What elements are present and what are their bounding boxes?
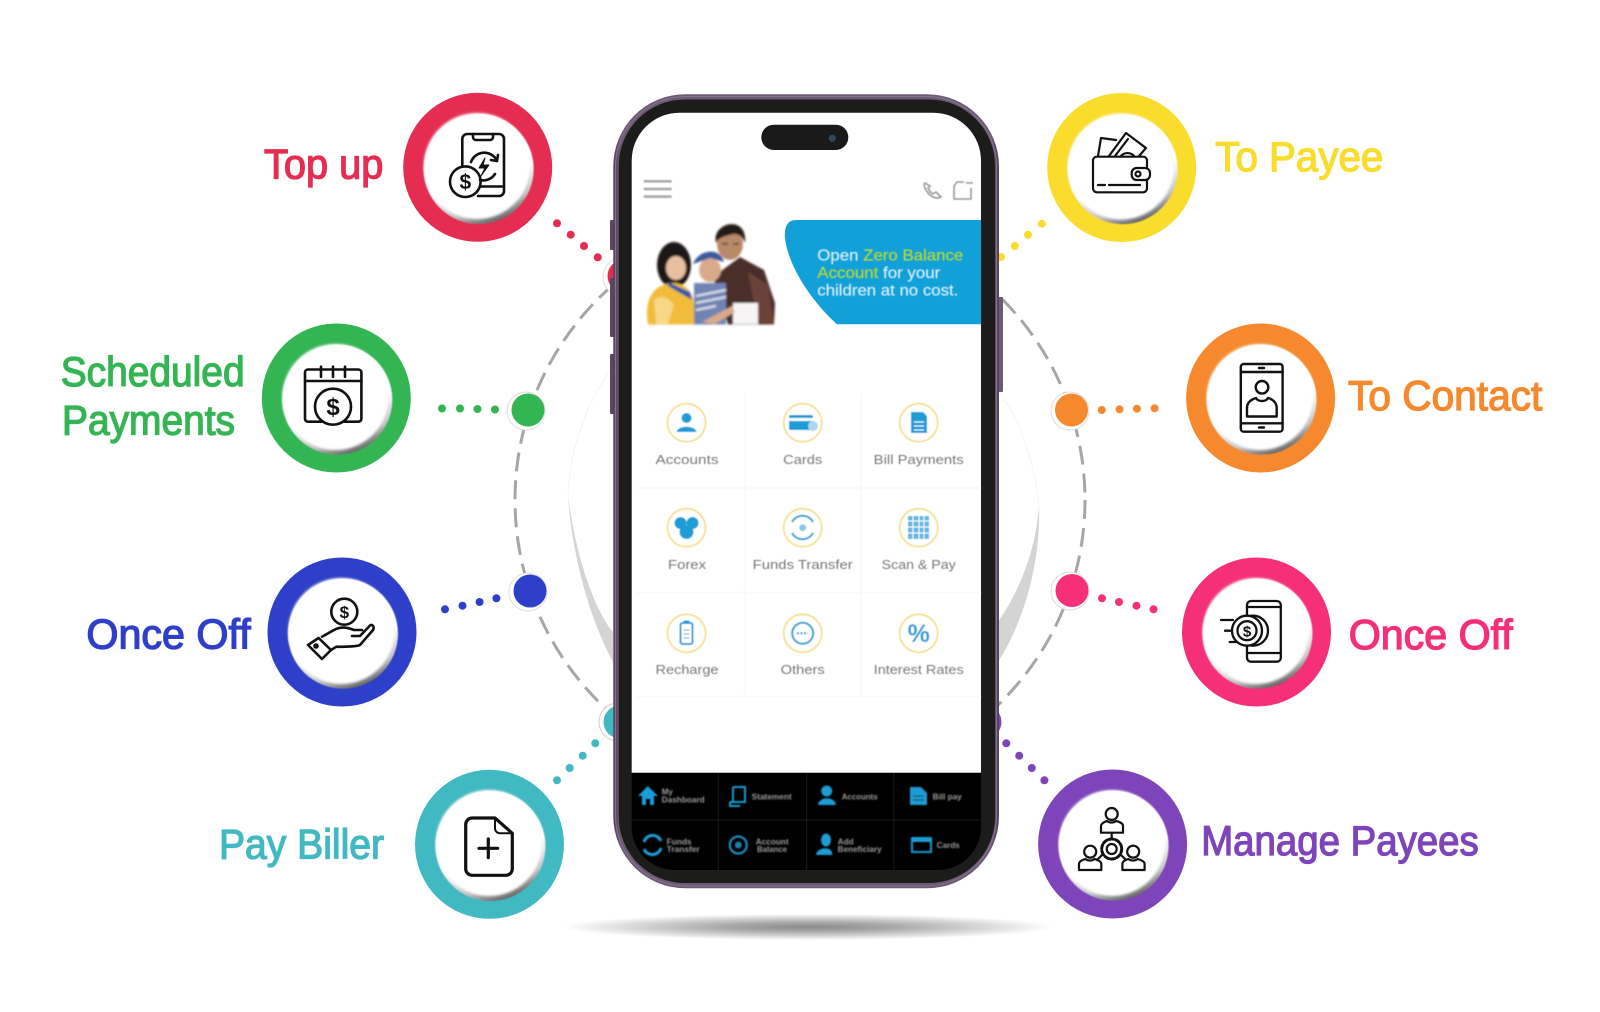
- nav: bill pay: Bill pay: [933, 792, 962, 802]
- service: funds transfer: [753, 509, 853, 572]
- notch with camera: [761, 125, 848, 150]
- once off pink ring: [1182, 558, 1331, 706]
- pay biller ring: [415, 770, 564, 919]
- banner text: children at no cost.: [817, 282, 958, 300]
- call icon: [924, 183, 941, 198]
- icon: calendar with coin: [305, 367, 361, 425]
- icon: hand holding coin: $: [340, 603, 350, 622]
- services grid: [637, 392, 981, 697]
- icon: phone with contact: [1241, 364, 1283, 432]
- phone ground shadow: [563, 914, 1053, 940]
- orbit node: once off pink: [1051, 572, 1089, 610]
- manage payees label: Manage Payees: [1201, 817, 1479, 864]
- service: others: [781, 614, 825, 677]
- nav: statement: Statement: [752, 792, 792, 802]
- feature: manage payees: [1038, 770, 1479, 918]
- service: cards: Cards: [783, 452, 823, 467]
- orbit node: manage payees: [968, 706, 1002, 738]
- service: interest rates: %: [908, 620, 930, 648]
- icon: document with plus: [466, 818, 512, 875]
- nav: account balance: [730, 836, 789, 854]
- side buttons: [610, 220, 1003, 414]
- feature: pay biller: [219, 770, 564, 919]
- scheduled payments label: Payments: [62, 396, 235, 443]
- nav: account balance: Balance: [757, 845, 788, 854]
- pay biller label: Pay Biller: [219, 820, 384, 867]
- service: bill payments: Bill Payments: [874, 452, 964, 467]
- connector dots: manage payees: [1002, 739, 1048, 784]
- banner text: [817, 248, 963, 300]
- to contact label: To Contact: [1348, 372, 1543, 419]
- top up label: Top up: [264, 140, 383, 187]
- dashed orbit circle: [515, 215, 1085, 785]
- connector dots: scheduled payments: [438, 404, 499, 414]
- connector dots: to payee: [997, 220, 1046, 261]
- nav: my dashboard: Dashboard: [662, 796, 705, 804]
- phone screen: [632, 113, 981, 773]
- nav: my dashboard: My: [662, 788, 673, 796]
- nav: accounts: [818, 786, 878, 805]
- feature: once off blue: [86, 558, 417, 706]
- nav: add beneficiary: Beneficiary: [838, 845, 882, 854]
- feature: top up: [264, 93, 552, 242]
- share icon: [954, 182, 973, 199]
- nav: funds transfer: Transfer: [667, 845, 700, 854]
- hamburger menu: [644, 180, 672, 198]
- nav: cards: Cards: [937, 841, 960, 850]
- scheduled payments label: [61, 348, 245, 443]
- promo banner: [785, 220, 981, 324]
- nav: funds transfer: Funds: [667, 838, 692, 846]
- service: scan and pay: [882, 509, 956, 572]
- nav: funds transfer: [644, 835, 700, 855]
- service: forex: [668, 509, 707, 572]
- service: forex: Forex: [668, 557, 707, 572]
- bottom navigation bar: [632, 773, 981, 870]
- connector dots: to contact: [1098, 404, 1159, 414]
- service: recharge: Recharge: [656, 662, 718, 677]
- icon: people around gear: [1079, 808, 1145, 870]
- manage payees ring: [1038, 770, 1187, 918]
- orbit node: once off blue: [509, 573, 547, 611]
- service: bill payments: [874, 404, 964, 467]
- icon: phone with coin and recharge: $: [459, 171, 471, 194]
- orbit node: pay biller: [599, 703, 637, 741]
- nav: accounts: Accounts: [842, 792, 878, 802]
- once off blue label: Once Off: [86, 610, 251, 657]
- feature: to payee: [1047, 93, 1383, 242]
- to payee label: To Payee: [1215, 133, 1383, 180]
- feature: once off pink: [1182, 558, 1513, 706]
- service: interest rates: Interest Rates: [874, 662, 964, 677]
- top up ring: [403, 93, 552, 242]
- icon: phone with speeding coin: $: [1243, 624, 1252, 640]
- connector dots: once off blue: [441, 594, 500, 613]
- icon: phone with coin and recharge: [450, 134, 504, 197]
- banner text: Account for your: [817, 265, 941, 282]
- service: others: Others: [781, 662, 825, 677]
- orbit node: scheduled payments: [507, 392, 545, 430]
- to contact ring: [1186, 324, 1335, 472]
- nav: bill pay: [910, 787, 962, 805]
- background crescent behind phone: [568, 368, 1039, 662]
- connector dots: top up: [553, 219, 602, 261]
- phone frame: [613, 94, 999, 888]
- nav: add beneficiary: [816, 834, 882, 855]
- scheduled ring: [262, 324, 411, 472]
- feature: scheduled payments: [61, 324, 411, 472]
- service: scan and pay: Scan & Pay: [882, 557, 956, 572]
- nav: add beneficiary: Add: [838, 838, 854, 846]
- connector dots: pay biller: [553, 739, 599, 784]
- feature: to contact: [1186, 324, 1543, 472]
- nav: my dashboard: [638, 786, 705, 805]
- nav: cards: [912, 838, 960, 852]
- icon: wallet with banknotes: [1093, 133, 1150, 192]
- connector dots: once off pink: [1098, 594, 1158, 613]
- service: recharge: [656, 614, 718, 677]
- service: accounts: [656, 404, 719, 467]
- family photo: [647, 224, 775, 324]
- once off blue ring: [268, 558, 416, 706]
- scheduled payments label: Scheduled: [61, 348, 245, 395]
- to payee ring: [1047, 93, 1196, 242]
- banner text: Open Zero Balance: [817, 248, 963, 264]
- once off pink label: Once Off: [1349, 611, 1513, 658]
- service: cards: [783, 404, 823, 467]
- orbit node: to contact: [1051, 392, 1089, 430]
- nav: statement: [730, 787, 792, 806]
- phone mockup: [610, 94, 1003, 888]
- icon: hand holding coin: [308, 599, 374, 659]
- orbit node: top up: [603, 258, 641, 296]
- service: funds transfer: Funds Transfer: [753, 557, 853, 572]
- service: accounts: Accounts: [656, 452, 719, 467]
- icon: calendar with coin: $: [326, 394, 340, 421]
- icon: phone with speeding coin: [1221, 601, 1281, 662]
- nav: account balance: Account: [756, 838, 789, 846]
- service: interest rates: [874, 614, 964, 677]
